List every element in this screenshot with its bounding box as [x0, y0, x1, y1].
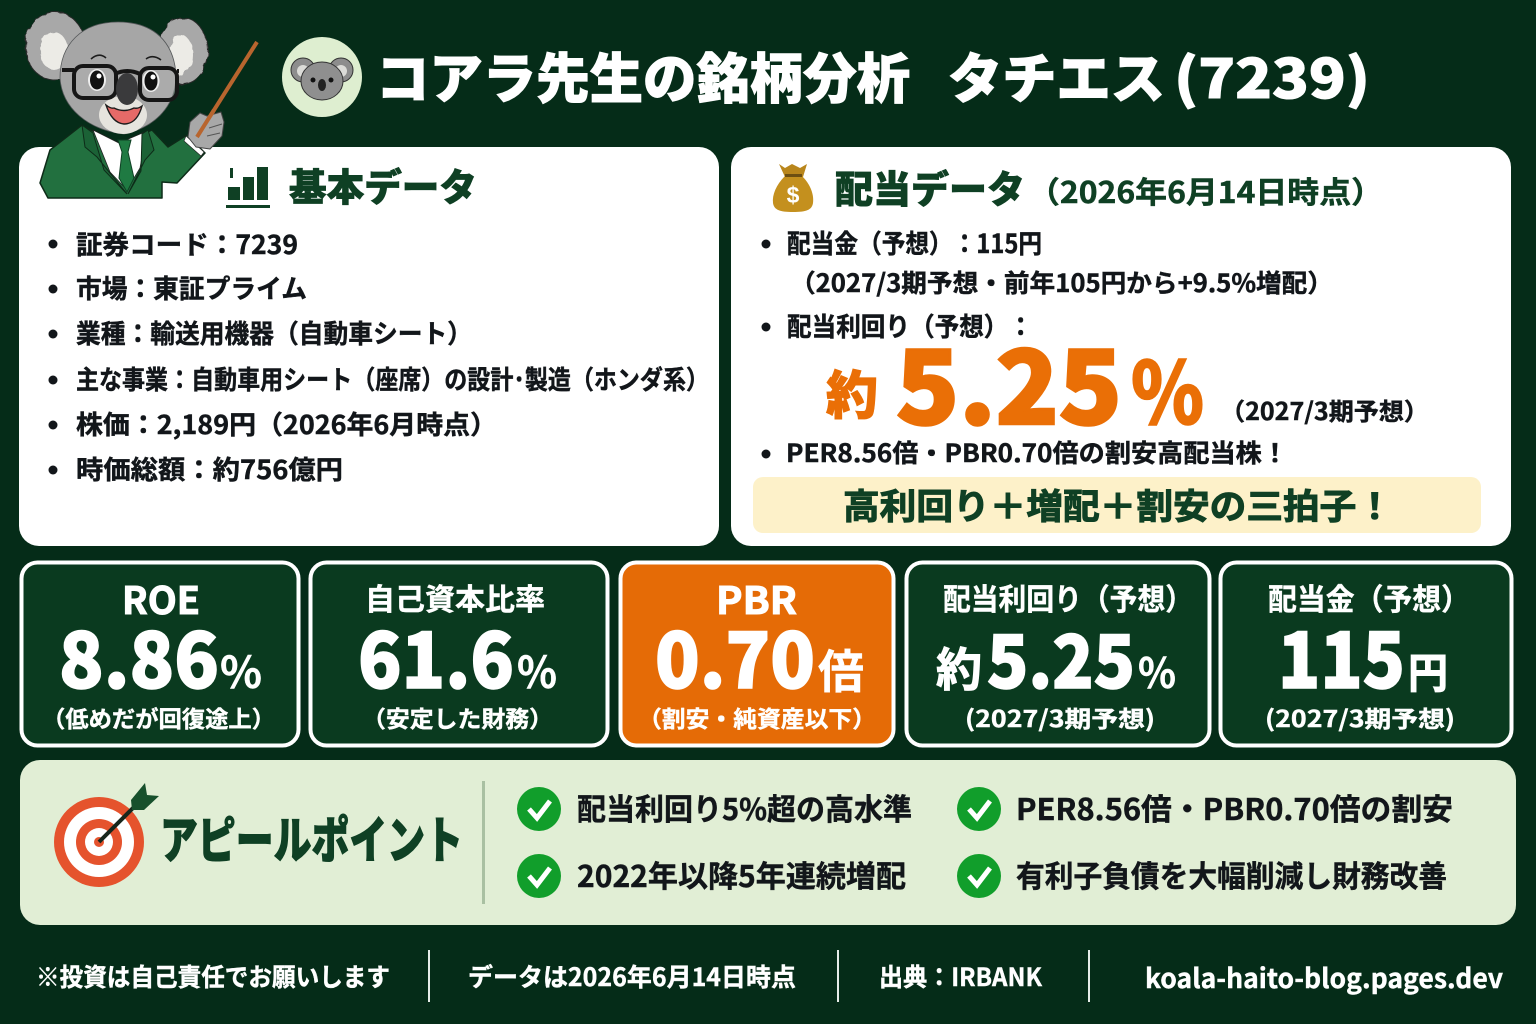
- glasses: [62, 66, 179, 100]
- point: debt reduction: 有利子負債を大幅削減し財務改善: [1016, 852, 1447, 896]
- card: PBR: （割安・純資産以下）: [638, 700, 876, 734]
- icon: money bag: $: [787, 182, 800, 208]
- point: valuation: PER8.56倍・PBR0.70倍の割安: [1016, 785, 1453, 829]
- list: valuation: PER8.56倍・PBR0.70倍の割安高配当株！: [786, 434, 1288, 470]
- card: forecast yield: 約: [936, 634, 982, 700]
- callout: [753, 477, 1481, 533]
- card: PBR: PBR: [716, 570, 797, 625]
- card: PBR: [620, 562, 894, 746]
- card: forecast dividend: 円: [1408, 640, 1448, 701]
- card: forecast dividend: 115: [1278, 600, 1405, 710]
- shirt: [93, 130, 147, 190]
- big yield number: （2027/3期予想）: [1220, 392, 1429, 427]
- callout: 高利回り＋増配＋割安の三拍子！: [843, 479, 1393, 530]
- card: PBR: 0.70: [655, 600, 815, 710]
- head: [60, 22, 176, 134]
- big yield number: 約: [826, 354, 878, 429]
- title: タチエス: [948, 35, 1165, 114]
- suit: [40, 125, 205, 198]
- title: コアラ先生の銘柄分析: [376, 35, 910, 114]
- mascot: koala teacher: [25, 12, 257, 198]
- footer: ※投資は自己責任でお願いします: [36, 958, 390, 994]
- list: basic data: 業種：輸送用機器（自動車シート）: [76, 314, 472, 351]
- card: ROE: [22, 562, 298, 746]
- heading date: （2026年6月14日時点）: [1028, 168, 1383, 212]
- list: yield label: 配当利回り（予想）：: [787, 307, 1033, 344]
- panel: basic data: [19, 147, 719, 546]
- card: equity ratio: 61.6: [358, 600, 514, 710]
- card: forecast yield: %: [1138, 640, 1176, 701]
- list: basic data: 市場：東証プライム: [76, 269, 307, 306]
- card: ROE: ROE: [122, 570, 200, 625]
- heading: appeal points: アピールポイント: [160, 801, 463, 873]
- list: basic data: 主な事業：自動車用シート（座席）の設計･製造（ホンダ系）: [76, 360, 709, 397]
- card: forecast dividend: [1220, 562, 1512, 746]
- list: basic data: 株価：2,189円（2026年6月時点）: [76, 405, 497, 442]
- icon: bar chart: [226, 167, 270, 208]
- mouth: [106, 105, 142, 124]
- list: basic data: 時価総額：約756億円: [76, 450, 343, 487]
- card: ROE: （低めだが回復途上）: [42, 700, 275, 734]
- cuff: [184, 136, 204, 156]
- divider: [482, 781, 485, 904]
- card: ROE: 8.86: [59, 600, 219, 710]
- card: PBR: 倍: [818, 636, 864, 702]
- card: forecast dividend: 配当金（予想）: [1268, 575, 1470, 619]
- card: forecast yield: (2027/3期予想): [965, 700, 1155, 734]
- card: ROE: %: [220, 637, 262, 701]
- big yield number: %: [1131, 324, 1204, 449]
- heading: basic data: 基本データ: [289, 157, 477, 212]
- list: dividend amount: 配当金（予想）：115円: [787, 224, 1042, 261]
- card: forecast yield: 5.25: [987, 604, 1135, 709]
- card: forecast yield: 配当利回り（予想）: [943, 575, 1193, 619]
- card: equity ratio: （安定した財務）: [362, 700, 553, 734]
- card: forecast dividend: (2027/3期予想): [1265, 700, 1455, 734]
- tie: [118, 140, 134, 192]
- panel: dividend data: [731, 147, 1511, 546]
- point: consecutive increase: 2022年以降5年連続増配: [577, 852, 906, 896]
- point: yield: 配当利回り5%超の高水準: [577, 785, 912, 829]
- footer: [36, 950, 1503, 1002]
- card: equity ratio: [310, 562, 608, 746]
- pointer: [197, 42, 257, 137]
- icon: target with arrow: [54, 783, 159, 887]
- title: [376, 35, 1370, 114]
- lapels: [82, 125, 127, 194]
- footer: koala-haito-blog.pages.dev: [1145, 957, 1503, 996]
- big yield number: 5.25: [896, 308, 1122, 453]
- icon: koala avatar: [282, 37, 362, 117]
- list: dividend amount: （2027/3期予想・前年105円から+9.5%増配）: [790, 264, 1333, 300]
- brows: [91, 55, 161, 60]
- heading: dividend data: 配当データ: [835, 159, 1025, 214]
- icon: money bag: [773, 164, 813, 212]
- list: basic data: 証券コード：7239: [76, 225, 298, 262]
- eyes: [88, 69, 106, 91]
- hand: [188, 112, 224, 149]
- footer: 出典：IRBANK: [879, 958, 1043, 994]
- list: basic data: [48, 225, 709, 487]
- list: dividend amount: [762, 224, 1333, 300]
- card: forecast yield: [906, 562, 1210, 746]
- big yield number: [826, 308, 1429, 453]
- card: equity ratio: %: [517, 637, 557, 701]
- nose: [116, 73, 138, 105]
- title: (7239): [1174, 35, 1370, 114]
- footer: データは2026年6月14日時点: [468, 958, 796, 994]
- card: equity ratio: 自己資本比率: [365, 575, 545, 619]
- panel: appeal points: [20, 760, 1516, 925]
- ears: [25, 12, 208, 84]
